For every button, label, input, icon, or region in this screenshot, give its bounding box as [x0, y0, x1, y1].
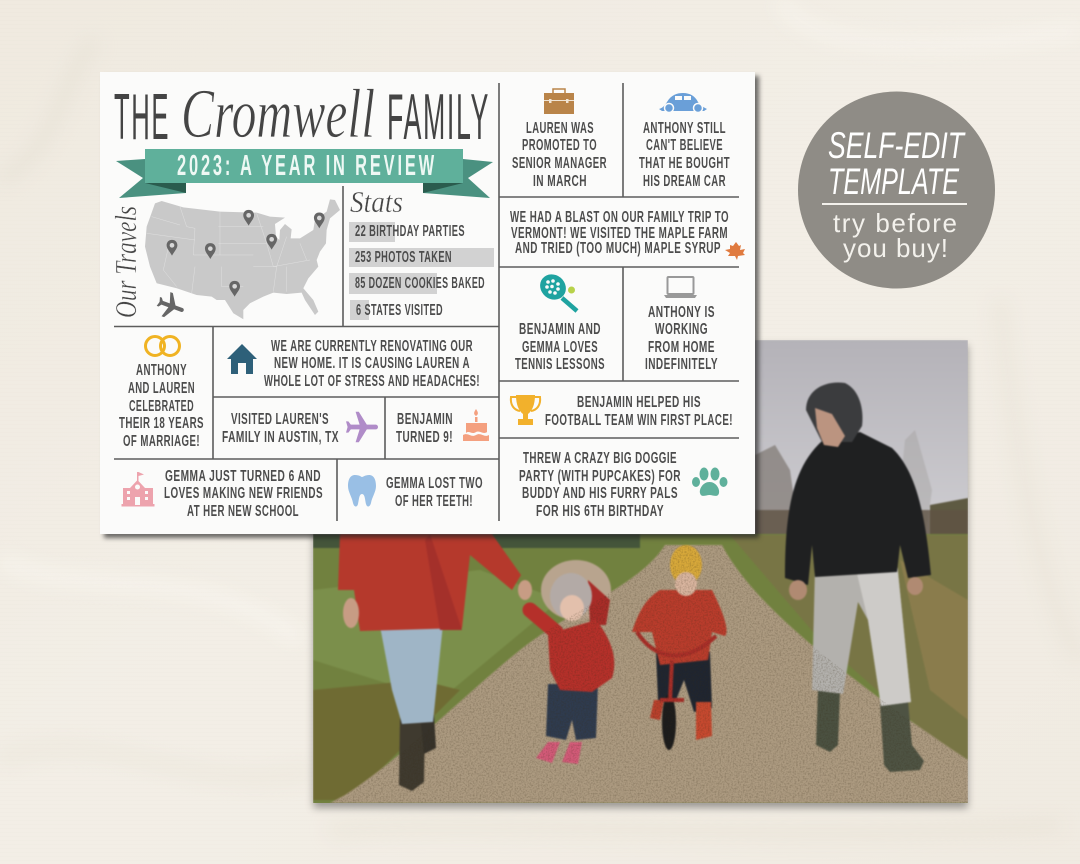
panel: gemma teeth: OF HER TEETH!	[395, 493, 473, 510]
badge subtext: try before	[833, 208, 957, 238]
panel: lauren promotion: PROMOTED TO	[522, 137, 597, 154]
panel: doggie party: THREW A CRAZY BIG DOGGIE	[523, 450, 677, 467]
panel: working from home: ANTHONY IS	[648, 304, 715, 321]
panel: anthony car	[639, 93, 730, 190]
panel: gemma teeth: GEMMA LOST TWO	[386, 475, 483, 492]
panel: tennis	[515, 269, 605, 373]
panel: football	[511, 394, 733, 429]
panel: gemma school	[122, 468, 323, 520]
icon: car	[659, 93, 707, 112]
icon: purple plane	[346, 412, 378, 442]
panel: working from home: WORKING	[655, 321, 708, 338]
panel: renovating: NEW HOME. IT IS CAUSING LAUREN A	[274, 355, 470, 372]
family photo	[313, 340, 968, 804]
panel: vermont trip	[510, 209, 745, 260]
panel: lauren promotion: SENIOR MANAGER	[512, 155, 607, 172]
panel: lauren promotion: LAUREN WAS	[526, 120, 594, 137]
panel: anniversary: ANTHONY	[136, 362, 187, 379]
badge heading: SELF-EDIT	[828, 125, 966, 166]
man	[785, 382, 931, 772]
panel: austin trip	[222, 411, 378, 446]
panel: football: FOOTBALL TEAM WIN FIRST PLACE!	[545, 412, 733, 429]
panel: gemma school: LOVES MAKING NEW FRIENDS	[164, 485, 323, 502]
title: THE	[114, 80, 170, 153]
panel: anthony car: ANTHONY STILL	[643, 120, 726, 137]
panel: lauren promotion	[512, 89, 607, 190]
panel: working from home: INDEFINITELY	[645, 356, 718, 373]
panel: benjamin birthday: BENJAMIN	[397, 411, 453, 428]
panel: tennis: TENNIS LESSONS	[515, 356, 605, 373]
stats heading: Stats	[350, 184, 403, 219]
panel: working from home	[645, 277, 718, 373]
panel: anthony car: THAT HE BOUGHT	[639, 155, 730, 172]
panel: vermont trip: VERMONT! WE VISITED THE MAPLE FARM	[511, 225, 728, 242]
icon: cake	[463, 409, 489, 441]
card: year in review: FAMILY	[387, 80, 490, 153]
panel: working from home: FROM HOME	[648, 339, 715, 356]
panel: austin trip: VISITED LAUREN'S	[231, 411, 329, 428]
icon: paw	[692, 468, 728, 496]
icon: house	[227, 344, 257, 374]
panel: anthony car: CAN'T BELIEVE	[646, 137, 723, 154]
panel: renovating: WHOLE LOT OF STRESS AND HEADACHES!	[264, 373, 480, 390]
boy on bike	[632, 545, 727, 750]
gravel road	[330, 545, 968, 803]
banner	[116, 149, 493, 198]
panel: gemma school: GEMMA JUST TURNED 6 AND	[165, 468, 321, 485]
girl	[530, 560, 614, 764]
grass	[313, 534, 968, 804]
panel: anniversary: CELEBRATED	[129, 398, 194, 415]
badge subtext: you buy!	[843, 233, 948, 263]
panel: benjamin birthday: TURNED 9!	[396, 429, 453, 446]
panel: renovating: WE ARE CURRENTLY RENOVATING OUR	[271, 338, 473, 355]
stats bars: 22 BIRTHDAY PARTIES	[355, 223, 465, 240]
panel: gemma teeth	[348, 475, 483, 510]
card: year in review	[100, 72, 755, 534]
icon: laptop	[664, 277, 697, 298]
badge heading: TEMPLATE	[828, 161, 960, 202]
sky	[313, 340, 968, 540]
icon: school	[122, 472, 154, 506]
panel: vermont trip: WE HAD A BLAST ON OUR FAMILY TRIP TO	[510, 209, 729, 226]
panel: doggie party	[519, 450, 728, 520]
stats bars: 253 PHOTOS TAKEN	[355, 249, 452, 266]
panel: anniversary: AND LAUREN	[128, 380, 195, 397]
icon: wedding rings	[146, 336, 180, 356]
icon: tennis racket	[535, 269, 577, 311]
stats bars: 6 STATES VISITED	[356, 302, 443, 319]
panel: renovating	[227, 338, 480, 390]
distant trees	[755, 431, 968, 535]
woman	[338, 534, 532, 791]
our travels label: Our Travels	[108, 206, 143, 318]
stats bars: 85 DOZEN COOKIES BAKED	[355, 275, 485, 292]
icon: tooth	[348, 475, 376, 507]
icon: briefcase	[544, 89, 574, 114]
panel: tennis: BENJAMIN AND	[519, 321, 601, 338]
panel: vermont trip: AND TRIED (TOO MUCH) MAPLE SYRUP	[515, 240, 721, 257]
panel: gemma school: AT HER NEW SCHOOL	[187, 503, 299, 520]
panel: anthony car: HIS DREAM CAR	[643, 173, 726, 190]
icon: grey plane	[154, 289, 188, 323]
panel: doggie party: FOR HIS 6TH BIRTHDAY	[536, 503, 664, 520]
icon: trophy	[511, 395, 540, 425]
banner: 2023: A YEAR IN REVIEW	[177, 150, 437, 182]
panel: austin trip: FAMILY IN AUSTIN, TX	[222, 429, 339, 446]
badge subtext	[833, 208, 957, 263]
panel: lauren promotion: IN MARCH	[533, 173, 587, 190]
badge heading	[828, 125, 966, 202]
icon: maple leaf	[725, 242, 745, 260]
grid lines	[114, 83, 739, 521]
panel: benjamin birthday	[396, 409, 489, 446]
panel: tennis: GEMMA LOVES	[522, 339, 598, 356]
panel: anniversary	[119, 336, 204, 450]
panel: anniversary: THEIR 18 YEARS	[119, 415, 204, 432]
title: Cromwell	[181, 76, 375, 153]
badge: self-edit template	[798, 92, 995, 288]
panel: anniversary: OF MARRIAGE!	[123, 433, 200, 450]
stats bars	[349, 222, 494, 320]
panel: football: BENJAMIN HELPED HIS	[577, 394, 701, 411]
us map with pins	[145, 199, 340, 319]
panel: doggie party: PARTY (WITH PUPCAKES) FOR	[519, 468, 681, 485]
panel: doggie party: BUDDY AND HIS FURRY PALS	[522, 485, 678, 502]
